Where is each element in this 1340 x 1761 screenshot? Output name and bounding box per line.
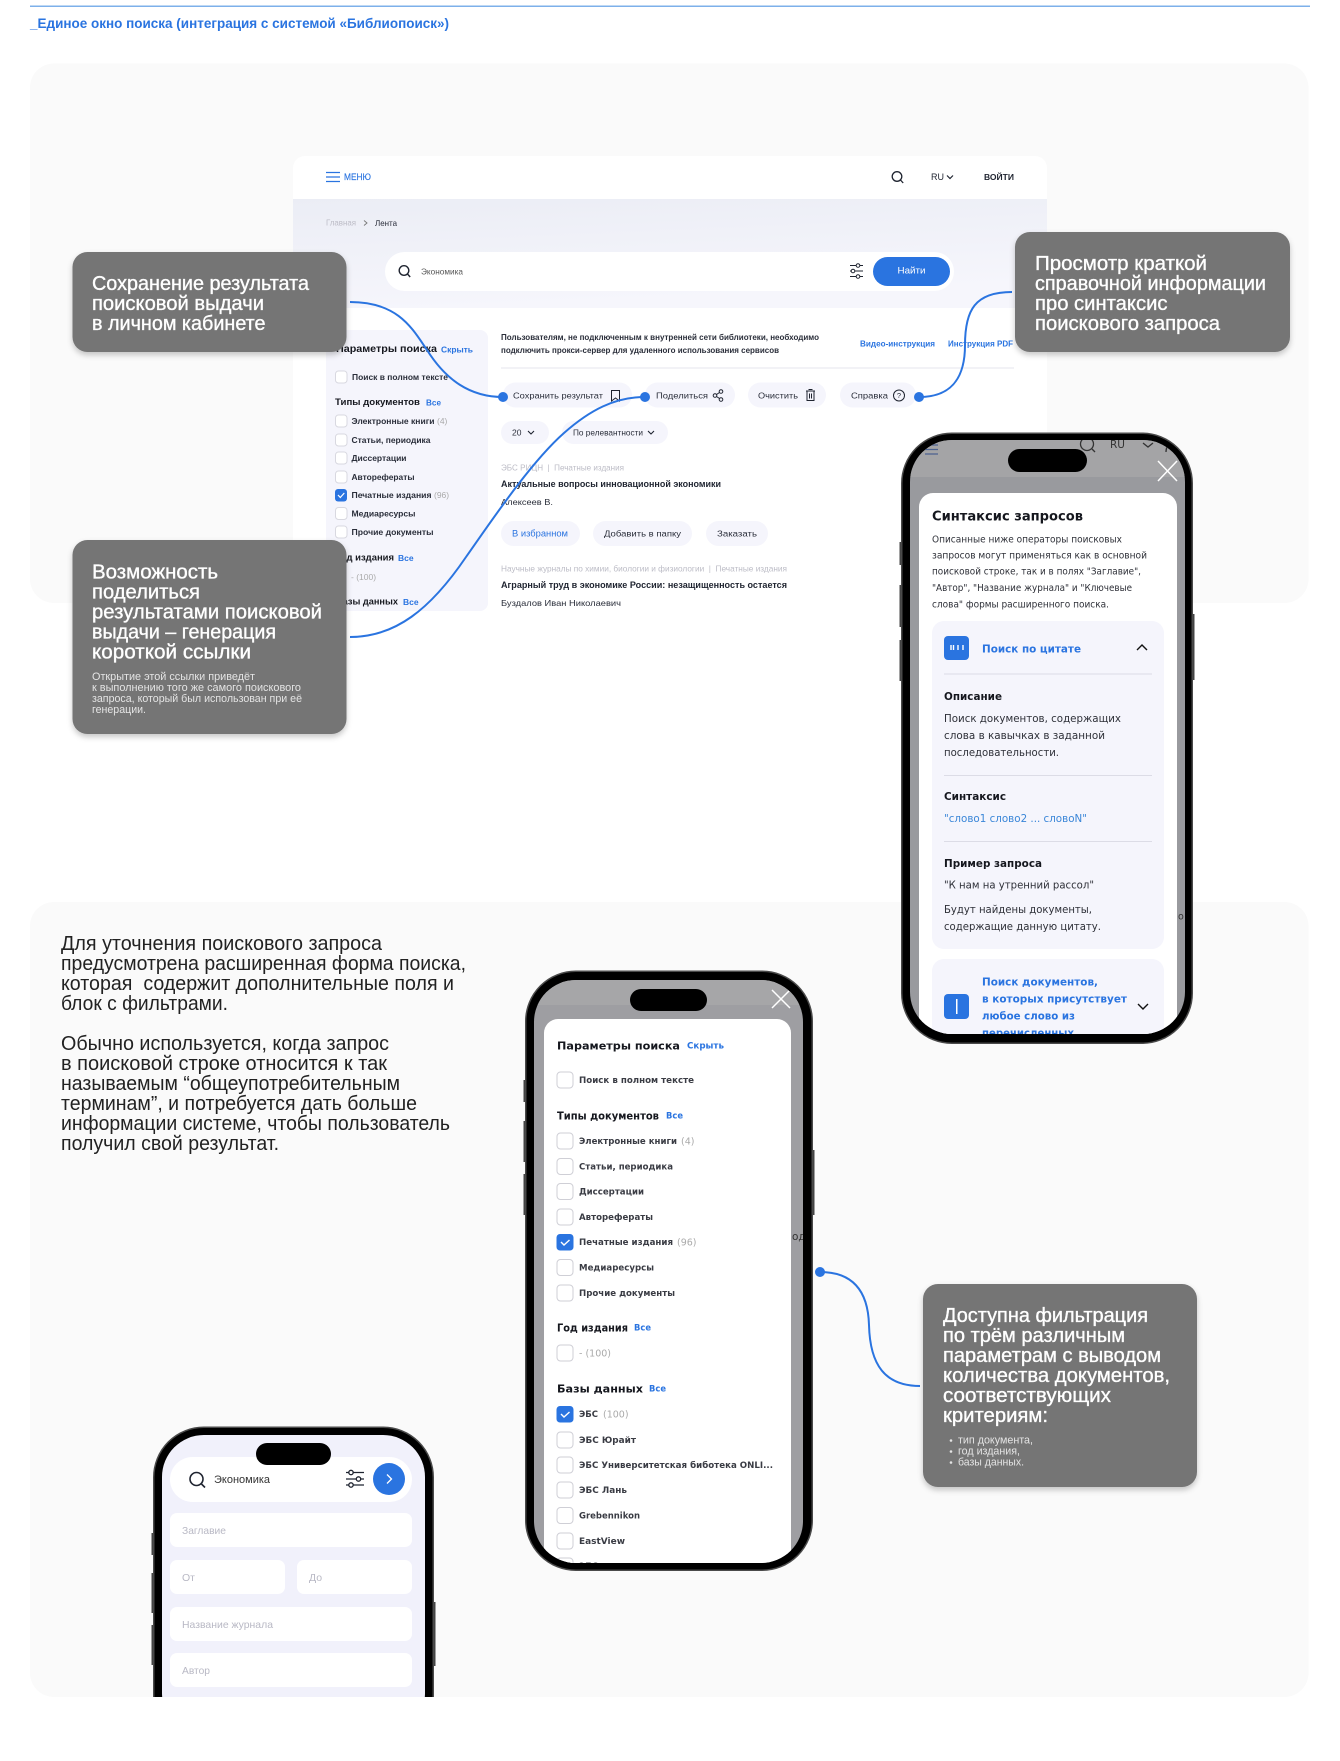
- year heading: [558, 1324, 651, 1333]
- callout note: запроса, который был использован при её: [92, 693, 302, 705]
- database filters: ЭБС Университетская биботека ONLI...: [579, 1460, 773, 1471]
- sort selector: [562, 421, 668, 444]
- callout: syntax help: про синтаксис: [1035, 293, 1168, 315]
- document type filters: Прочие документы: [579, 1289, 675, 1299]
- panel: advanced search background: [30, 902, 1308, 1697]
- accordion title: в которых присутствует: [982, 992, 1128, 1006]
- callout: syntax help: поискового запроса: [1035, 313, 1221, 335]
- language selector: RU: [931, 172, 944, 182]
- dynamic island: [1008, 449, 1087, 472]
- accordion title: Поиск документов,: [982, 976, 1098, 988]
- text block: advanced search description: [61, 933, 466, 1155]
- modal intro: слова" формы расширенного поиска.: [932, 600, 1109, 610]
- database filters: EastView: [579, 1537, 625, 1547]
- field: author: Автор: [182, 1665, 210, 1677]
- chip: clear: Очистить: [758, 390, 799, 400]
- field: from: От: [182, 1572, 195, 1584]
- example section: Пример запроса: [944, 858, 1042, 870]
- window background: [293, 156, 1047, 650]
- stray background text: о: [1178, 912, 1184, 922]
- icon: search: [892, 172, 903, 183]
- search result 1: Алексеев В.: [501, 497, 553, 507]
- modal intro: [932, 534, 1147, 610]
- document type filters: Медиаресурсы: [579, 1264, 654, 1274]
- database filters: ЭБС Лань: [579, 1486, 627, 1496]
- title: _Единое окно поиска (интеграция с системой «Библиопоиск»): [29, 15, 449, 31]
- dynamic island: [630, 989, 707, 1011]
- databases heading: Базы данных: [336, 596, 399, 608]
- syntax section: Синтаксис: [944, 791, 1006, 803]
- search result 2: Аграрный труд в экономике России: незащищенность остается: [501, 580, 787, 590]
- field: journal name: [170, 1607, 412, 1641]
- accordion: any word search: [932, 959, 1164, 1034]
- icon: chevron up: [1137, 645, 1147, 650]
- document type filters: Статьи, периодика: [352, 435, 431, 445]
- document type filters: Диссертации: [579, 1188, 644, 1198]
- search result 1: ЭБС РИЦН | Печатные издания: [501, 462, 624, 472]
- proxy notice: подключить прокси-сервер для удаленного использования сервисов: [501, 345, 779, 355]
- phone: filters: [524, 971, 814, 1619]
- callout note: генерации.: [92, 704, 146, 716]
- document types heading: Все: [426, 398, 441, 408]
- query text: Экономика: [421, 266, 463, 276]
- year heading: Год издания: [336, 552, 394, 564]
- description section: последовательности.: [944, 747, 1059, 759]
- modal heading: Параметры поиска: [557, 1040, 680, 1052]
- result actions: [501, 521, 768, 546]
- example section: [944, 858, 1101, 933]
- callout: filtering: количества документов,: [943, 1365, 1170, 1387]
- side buttons: [524, 1080, 814, 1215]
- filter list: [950, 1434, 1033, 1468]
- filter list: базы данных.: [958, 1456, 1024, 1468]
- callout: syntax help: Просмотр краткой: [1035, 253, 1207, 275]
- document type filters: Электронные книги: [352, 416, 434, 426]
- databases heading: Все: [649, 1384, 666, 1394]
- top rule: [30, 6, 1310, 7]
- callout: syntax help: справочной информации: [1035, 273, 1266, 295]
- breadcrumb: Лента: [375, 218, 397, 228]
- text block: advanced search description: Для уточнения поискового запроса: [61, 933, 383, 955]
- icon: search: [190, 1472, 205, 1488]
- icon: menu: [326, 172, 340, 182]
- page size selector: [501, 421, 549, 444]
- modal heading: Синтаксис запросов: [932, 510, 1083, 524]
- connector: filters: [815, 1267, 920, 1386]
- description section: Описание: [944, 691, 1002, 703]
- document type filters: [335, 415, 449, 538]
- document type filters: (4): [681, 1136, 694, 1148]
- document type filters: Прочие документы: [352, 527, 434, 537]
- instruction links: Видео-инструкция: [860, 338, 935, 348]
- phone screen: [162, 1435, 425, 1697]
- phone: syntax help: [900, 433, 1194, 1093]
- text block: advanced search description: предусмотрена расширенная форма поиска,: [61, 953, 466, 975]
- menu label: МЕНЮ: [344, 172, 371, 182]
- accordion title: [982, 978, 1127, 1034]
- icon: search: [399, 266, 410, 277]
- text block: advanced search description: терминам”, и потребуется дать больше: [61, 1093, 417, 1115]
- result actions: Заказать: [717, 528, 758, 538]
- accordion title: перечисленных: [982, 1026, 1074, 1040]
- filter list: тип документа,: [958, 1434, 1033, 1446]
- find button: Найти: [898, 266, 926, 276]
- icon: or operator: [944, 994, 969, 1019]
- accordion: quote search: [932, 621, 1164, 949]
- database filters: ЭБС: [579, 1410, 598, 1420]
- description section: слова в кавычках в заданной: [944, 730, 1105, 742]
- document type filters: Диссертации: [352, 453, 406, 463]
- database filters: Grebennikon: [579, 1512, 640, 1522]
- document type filters: Печатные издания: [352, 490, 432, 500]
- year heading: Все: [634, 1324, 651, 1334]
- chip: clear: [748, 382, 826, 408]
- callout: save result: Сохранение результата: [92, 273, 310, 295]
- text block: advanced search description: информации системе, чтобы пользователь: [61, 1113, 450, 1135]
- callout: filtering: соответствующих: [943, 1385, 1111, 1407]
- syntax section: [944, 792, 1086, 822]
- instruction links: Инструкция PDF: [948, 338, 1013, 348]
- document type filters: (96): [677, 1238, 697, 1248]
- description section: Поиск документов, содержащих: [944, 713, 1121, 725]
- text block: advanced search description: Обычно используется, когда запрос: [61, 1033, 389, 1055]
- callout: share results: результатами поисковой: [92, 602, 322, 624]
- field: title: Заглавие: [182, 1525, 226, 1537]
- search button: [373, 1463, 405, 1495]
- dynamic island: [256, 1443, 331, 1465]
- example section: содержащие данную цитату.: [944, 921, 1101, 933]
- year filter: [557, 1345, 611, 1361]
- year heading: Все: [398, 553, 414, 563]
- callout note: Открытие этой ссылки приведёт: [92, 671, 255, 683]
- search result 2: [501, 564, 787, 608]
- document types heading: Типы документов: [335, 397, 420, 408]
- callout: share results: короткой ссылки: [92, 642, 251, 664]
- hero band: [293, 199, 1047, 308]
- callout: share results: поделиться: [92, 582, 200, 604]
- modal intro: "Автор", "Название журнала" и "Ключевые: [932, 583, 1132, 594]
- chip: help: [840, 382, 916, 408]
- phone body: [526, 971, 812, 1570]
- callout note: к выполнению того же самого поискового: [92, 682, 301, 694]
- phone body: [902, 433, 1192, 1043]
- accordion title: любое слово из: [982, 1010, 1075, 1022]
- document types heading: Типы документов: [557, 1110, 659, 1122]
- connector: share: [350, 392, 650, 637]
- callout: filtering: по трём различным: [943, 1325, 1125, 1347]
- field: to: До: [309, 1572, 322, 1584]
- search result 2: Научные журналы по химии, биологии и физиологии | Печатные издания: [501, 564, 787, 574]
- text block: advanced search description: блок с фильтрами.: [61, 993, 228, 1015]
- icon: filters: [850, 264, 863, 278]
- document type filters: Медиаресурсы: [352, 508, 416, 518]
- databases heading: Все: [403, 597, 419, 607]
- callout: save result: поисковой выдачи: [92, 293, 264, 315]
- phone screen: [534, 980, 806, 1619]
- proxy notice: Пользователям, не подключенным к внутренней сети библиотеки, необходимо: [501, 332, 819, 342]
- dimmed header: [925, 440, 1168, 455]
- text block: advanced search description: в поисковой строке относится к так: [61, 1053, 387, 1075]
- filter modal: [544, 1019, 791, 1619]
- hide link: Скрыть: [441, 344, 473, 354]
- modal intro: запросов могут применяться как в основной: [932, 550, 1147, 562]
- chip: share: Поделиться: [656, 390, 708, 400]
- breadcrumb: [326, 218, 397, 228]
- find button: [873, 257, 950, 286]
- callout: save result: в личном кабинете: [92, 313, 266, 335]
- field: author: [170, 1653, 412, 1687]
- example section: Будут найдены документы,: [944, 904, 1092, 916]
- sidebar: search parameters: [326, 330, 488, 611]
- dimmed language label: RU: [1110, 439, 1125, 451]
- panel: desktop search background: [30, 64, 1308, 603]
- text block: advanced search description: называемым “общеупотребительным: [61, 1073, 400, 1095]
- icon: quote: [944, 636, 969, 660]
- desktop search window: [293, 156, 1047, 650]
- query text: Экономика: [214, 1474, 271, 1486]
- callout: syntax help: [1015, 232, 1290, 352]
- icon: close: [1158, 461, 1177, 481]
- login: ВОЙТИ: [984, 171, 1014, 182]
- modal intro: Описанные ниже операторы поисковых: [932, 534, 1122, 546]
- callout: filtering: параметрам с выводом: [943, 1345, 1161, 1367]
- databases heading: [558, 1384, 666, 1394]
- full text option: [557, 1072, 694, 1088]
- databases heading: Базы данных: [557, 1382, 643, 1396]
- hide link: Скрыть: [687, 1042, 724, 1052]
- search bar: [170, 1457, 412, 1502]
- sort selector: По релевантности: [573, 428, 643, 438]
- description section: [944, 691, 1121, 759]
- phone: advanced search form: [152, 1426, 436, 1697]
- icon: close: [772, 990, 790, 1008]
- stray background text: од: [792, 1231, 806, 1243]
- breadcrumb: Главная: [326, 218, 356, 228]
- document type filters: Статьи, периодика: [579, 1162, 673, 1172]
- search result 2: Буздалов Иван Николаевич: [501, 598, 621, 608]
- document type filters: Авторефераты: [352, 472, 414, 482]
- syntax modal: [919, 493, 1177, 1093]
- instruction links: [860, 338, 1013, 348]
- full text option: Поиск в полном тексте: [352, 372, 448, 382]
- callout: share results: [72, 540, 346, 734]
- filter list: год издания,: [958, 1446, 1020, 1458]
- database filters: ЭБС: [579, 1562, 598, 1572]
- icon: filters: [346, 1470, 364, 1487]
- field: title: [170, 1513, 412, 1547]
- phone screen: [910, 438, 1185, 1093]
- field: to: [297, 1560, 412, 1594]
- full text option: Поиск в полном тексте: [579, 1076, 694, 1086]
- language selector: [931, 172, 953, 182]
- field: from: [170, 1560, 285, 1594]
- accordion title: Поиск по цитате: [982, 642, 1081, 656]
- phone body: [153, 1426, 434, 1697]
- document types heading: Все: [666, 1112, 683, 1122]
- document type filters: [556, 1133, 697, 1301]
- document type filters: (4): [437, 416, 448, 426]
- side buttons: [152, 1533, 436, 1666]
- callout note: [92, 671, 302, 716]
- proxy notice: [501, 332, 819, 355]
- database filters: (100): [603, 1410, 629, 1420]
- callout: share results: Возможность: [92, 562, 218, 584]
- icon: chevron down: [1138, 1004, 1148, 1009]
- chip: save result: [503, 382, 632, 408]
- callout: share results: выдачи – генерация: [92, 622, 276, 644]
- year heading: Год издания: [557, 1322, 628, 1334]
- example section: "К нам на утренний рассол": [944, 880, 1094, 892]
- text block: advanced search description: получил свой результат.: [61, 1133, 279, 1155]
- chip: share: [645, 382, 735, 408]
- chip: help: ?: [897, 391, 901, 400]
- search result 1: Актуальные вопросы инновационной экономики: [501, 479, 721, 489]
- document type filters: Авторефераты: [579, 1213, 653, 1223]
- callout: filtering: критериям:: [943, 1405, 1048, 1427]
- syntax section: "слово1 слово2 ... словоN": [944, 813, 1087, 825]
- connector: help: [914, 292, 1012, 402]
- sidebar heading: Параметры поиска: [336, 343, 437, 355]
- connector: save result: [350, 302, 508, 402]
- page size selector: 20: [512, 428, 522, 438]
- modal intro: поисковой строке, так и в полях "Заглавие",: [932, 566, 1141, 578]
- search bar: [385, 252, 954, 291]
- chip: help: Справка: [851, 390, 888, 400]
- search result 1: [501, 462, 768, 546]
- document type filters: Электронные книги: [579, 1137, 677, 1147]
- document type filters: Печатные издания: [579, 1238, 673, 1248]
- year filter: - (100): [351, 572, 376, 582]
- database filters: ЭБС Юрайт: [579, 1436, 637, 1446]
- callout: filtering: Доступна фильтрация: [943, 1305, 1148, 1327]
- result actions: В избранном: [512, 528, 568, 538]
- chip: save result: Сохранить результат: [513, 390, 603, 400]
- field: journal name: Название журнала: [182, 1619, 273, 1631]
- side buttons: [900, 542, 1194, 681]
- result actions: Добавить в папку: [604, 528, 682, 538]
- text block: advanced search description: которая содержит дополнительные поля и: [61, 973, 454, 995]
- callout: save result: [72, 252, 346, 352]
- database filters: [556, 1406, 773, 1574]
- callout: filtering: [923, 1284, 1197, 1487]
- document type filters: (96): [434, 490, 449, 500]
- navigation bar: [326, 171, 1014, 183]
- year filter: - (100): [579, 1348, 611, 1360]
